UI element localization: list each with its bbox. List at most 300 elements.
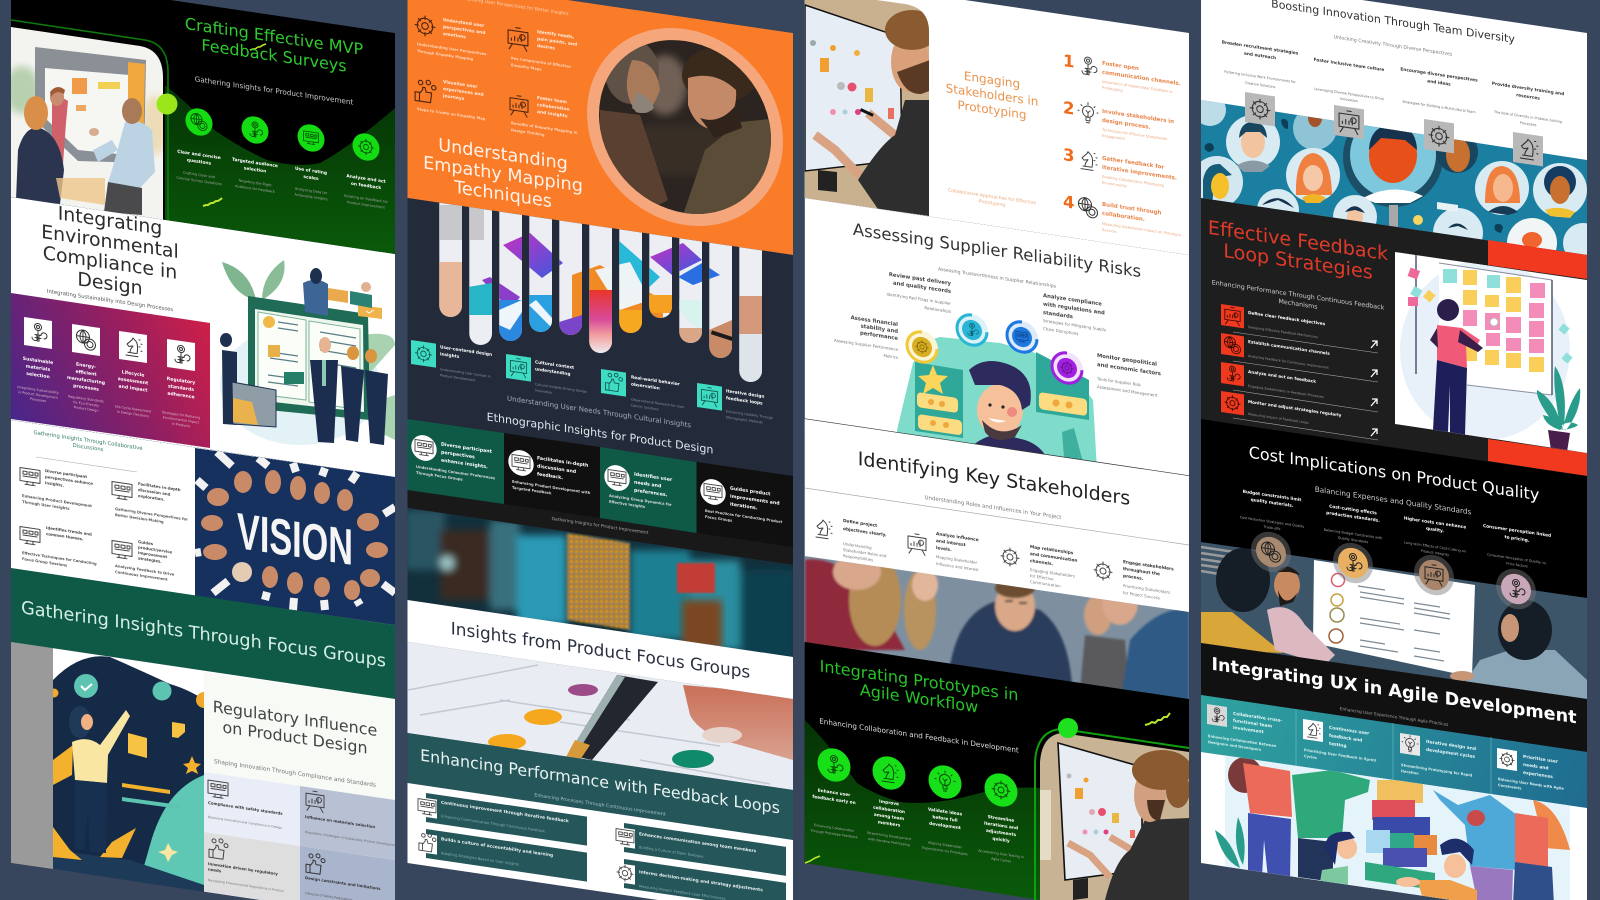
illustration: smiling man with ratings: [897, 337, 1097, 470]
white slide background: [805, 0, 1189, 255]
item 4: Best Practices for Conducting Product: [705, 509, 783, 524]
item 2: with Iterative Prototyping: [868, 837, 910, 847]
item 4: iterations.: [730, 502, 758, 512]
item: financial: [834, 313, 899, 360]
card 3: Centric Solutions: [631, 403, 659, 412]
card 1: insights: [440, 351, 460, 360]
column 3: quality.: [1426, 526, 1444, 534]
icon tile 4: [167, 339, 195, 371]
column 1: Creative Solutions: [1245, 81, 1276, 89]
column 2: [1324, 503, 1382, 546]
arrow 3: [1371, 399, 1377, 406]
item 4: Prioritizing Stakeholders: [1123, 583, 1170, 595]
item 2: selection: [244, 165, 266, 175]
item 1: Through Empathy Mapping: [417, 49, 473, 61]
item 1: [176, 149, 222, 186]
column 2: Cost-cutting effects: [1329, 504, 1377, 517]
column 4: to pricing.: [1505, 534, 1530, 544]
title: Integrating UX in Agile Development: [1211, 655, 1577, 728]
item 1: in Product Development: [18, 390, 58, 400]
item: geopolitical: Tools for Supplier Risk: [1096, 376, 1142, 388]
step 4: Success: [1102, 228, 1117, 234]
item 2: Analyze influence: [936, 531, 979, 543]
item 3 detail: Focus Group Sessions: [22, 557, 68, 568]
card 2: [1303, 719, 1376, 769]
lime squiggle bottom: [805, 856, 820, 863]
column 4: [1483, 523, 1551, 572]
list row 4: [1221, 391, 1342, 430]
icon badge 1: [1251, 529, 1291, 575]
column 4: Processes: [1520, 121, 1537, 127]
subtitle: Integrating Sustainability into Design Processes: [47, 289, 173, 313]
item 2: processes: [73, 383, 99, 393]
icon circle 4: [352, 132, 380, 162]
item 4: and insights: [537, 109, 568, 120]
item 2: Targeted audience: [232, 157, 278, 169]
photo ring: [587, 15, 783, 239]
item 4: Regulatory: [167, 376, 195, 386]
column 1: quality materials.: [1251, 497, 1294, 509]
icon circle 1: [186, 107, 212, 137]
text block background: [204, 672, 395, 800]
card 1: Understanding User Context in: [440, 367, 491, 379]
icon tile 2: [72, 324, 100, 356]
item 2: desires: [537, 43, 555, 52]
image frame: [1035, 729, 1189, 900]
item 4: [978, 813, 1024, 865]
item 1: perspectives: [441, 450, 475, 460]
step 2: Involve stakeholders in: [1102, 109, 1174, 125]
card 4: experiences: [1523, 770, 1553, 780]
subtitle: Balancing Expenses and Quality Standards: [1315, 485, 1471, 517]
item 4: process.: [1123, 573, 1144, 582]
card 2: feedback and: [1329, 733, 1362, 744]
lime accent circle: [156, 94, 178, 114]
card 1: Enhancing Communication Through Continuous Feedback: [441, 814, 546, 834]
card 1: Collaborative cross-: [1233, 711, 1282, 724]
panel: Effective Feedback Loop Strategies: [1201, 198, 1590, 476]
step 4: [1063, 192, 1182, 243]
item 3: Communication: [1030, 579, 1061, 589]
item 1: Understand user: [443, 17, 485, 29]
card 2: Cycles: [1304, 754, 1317, 760]
column 1: [1222, 39, 1299, 93]
heading: Gathering Insights Through Collaborative: [34, 430, 142, 452]
item 3: scales: [303, 174, 319, 182]
column 2: Innovation: [1340, 97, 1358, 103]
item 1: Diverse participant: [441, 442, 493, 455]
card 3: Iteration: [1401, 769, 1419, 776]
column 2: Foster inclusive team culture: [1314, 57, 1384, 73]
white slide background: [805, 419, 1189, 699]
card 1: Product Development: [440, 373, 476, 383]
title: Enhancing Performance with Feedback Loops: [420, 746, 780, 817]
item 1: objectives clearly.: [843, 526, 887, 538]
item 2: Key Components of Effective: [511, 56, 571, 69]
item 3: [417, 75, 486, 121]
panel: Integrating Environmental Compliance in Design: [11, 197, 395, 477]
item 1: emotions: [443, 31, 466, 40]
icon badge 4: [1496, 566, 1536, 612]
title: Crafting Effective MVP: [185, 14, 363, 59]
item 1: [417, 13, 487, 64]
card 1: User-centered design: [440, 344, 492, 358]
icon badge 2: [1333, 540, 1373, 586]
item 2: Regulatory Standards: [68, 394, 104, 404]
item 1: Define project: [843, 518, 877, 529]
card 3: Enhances communication among team members: [639, 831, 757, 854]
item 2: for Eco-Friendly: [73, 400, 99, 408]
item 3: Identifies user: [634, 472, 673, 483]
title: Insights from Product Focus Groups: [451, 619, 750, 683]
item 3: Lifecycle: [122, 369, 144, 379]
photo: man at a wall screen: [1035, 725, 1195, 900]
panel: Integrating Prototypes in Agile Workflow: [805, 642, 1195, 900]
card 4: Iterative design: [726, 388, 764, 400]
card 3: Iterative design and: [1426, 739, 1476, 752]
item 3: preferences.: [634, 488, 668, 498]
item 1: [45, 469, 93, 487]
item 2: Facilitates in-depth: [138, 481, 181, 492]
heading: Discussions: [73, 443, 104, 453]
item 2: Mapping Stakeholder: [936, 554, 978, 565]
safety item: Compliance with safety standards: [208, 800, 283, 816]
item 3: Life Cycle Assessment: [115, 404, 152, 414]
step 3: iterative improvements.: [1102, 165, 1177, 182]
item 2: Audience for Feedback: [235, 184, 276, 194]
green wave: [165, 85, 395, 256]
card 1: involvement: [1233, 725, 1264, 735]
item 4: adherence: [167, 391, 195, 401]
item 4: iterations and: [984, 821, 1018, 831]
icon circle 4: [984, 771, 1018, 809]
column 3: Long-term Effects of Cost-Cutting on: [1404, 540, 1466, 554]
item 1: Responsibilities: [843, 553, 873, 562]
item: review records: Review past delivery: [889, 272, 952, 287]
item 1: Enhance user: [818, 788, 851, 799]
title: Cost Implications on Product Quality: [1249, 443, 1540, 504]
green cell 1: [408, 419, 504, 504]
item 1 detail: Through User Insights: [22, 499, 70, 511]
column 2: [1314, 57, 1384, 107]
cell: safety: [204, 772, 300, 846]
item 4: Strategies for Reducing: [162, 410, 200, 420]
ring 3: [1006, 319, 1038, 355]
item 1: enhance insights.: [441, 458, 488, 470]
card 2: Innovation: [535, 388, 552, 395]
card dividers: [1296, 709, 1491, 794]
card 2: [418, 828, 587, 882]
column 3: and ideas: [1427, 78, 1451, 88]
meeting photo: [1195, 535, 1595, 710]
item 3: needs and: [634, 480, 661, 490]
item 2: Improve: [879, 799, 899, 807]
step 4: 4: [1063, 192, 1074, 213]
icon circle 3: [298, 123, 324, 153]
title: Techniques: [453, 178, 552, 212]
card 1: Continuous improvement through iterative feedback: [441, 800, 569, 824]
item 2: [908, 527, 979, 572]
item: compliance: standards: [1043, 310, 1073, 320]
item 3: experiences and: [443, 86, 484, 98]
card 2: Adapting Strategies Based on User Insights: [441, 851, 519, 867]
icon: chart board: [508, 27, 528, 51]
item 4: Agile Cycles: [991, 857, 1011, 863]
card 1: functional team: [1233, 718, 1272, 730]
step 1: communication channels.: [1102, 70, 1181, 87]
card 2: Prioritizing User Feedback in Sprint: [1304, 748, 1376, 763]
item 2: manufacturing: [67, 375, 105, 386]
icon: thumbs up: [415, 78, 436, 104]
card 2: understanding: [535, 366, 570, 377]
item 3: Identifies trends and: [46, 525, 92, 537]
panel: Insights from Product Focus Groups: [400, 500, 800, 699]
item 4: standards: [168, 383, 194, 393]
column 1: Broaden recruitment strategies: [1222, 39, 1299, 57]
item 4: Foster team: [537, 95, 567, 105]
icon badge 3: [1414, 552, 1454, 598]
materials item: Regulatory Challenges in Sustainable Product Development: [305, 830, 398, 848]
item 3: journeys: [442, 93, 465, 102]
item 4: [344, 173, 388, 210]
dark slide background: [408, 198, 793, 476]
item: geopolitical: Monitor geopolitical: [1097, 353, 1157, 368]
item 1 detail: Enhancing Product Development: [22, 493, 92, 508]
step 1: Importance of Stakeholder Feedback in: [1102, 80, 1172, 94]
item 4: collaboration: [537, 102, 570, 113]
item 1: perspectives enhance: [45, 474, 93, 486]
white lower area: [408, 783, 793, 900]
step 3: Enabling Collaborative Prototyping: [1102, 175, 1164, 188]
item: compliance: Analyze compliance: [1043, 293, 1102, 308]
item: compliance: Strategies for Mitigating Supply: [1043, 318, 1107, 332]
subtitle: Prototyping: [979, 199, 1005, 208]
item: geopolitical: Assessment and Management: [1097, 384, 1158, 398]
item 1: Diverse participant: [45, 468, 87, 479]
team photo: [800, 550, 1195, 710]
item 2: Streamlining Development: [867, 831, 912, 841]
card 1: [1207, 704, 1282, 755]
item 1: Integrating Sustainability: [17, 385, 59, 395]
item 2: collaboration: [873, 805, 905, 815]
item 2: Product Design: [74, 405, 98, 413]
item 1: Through Prototype Feedback: [809, 828, 858, 839]
item 1: Processes: [30, 397, 46, 403]
item 2: Influence and Interest: [936, 561, 979, 572]
item: financial: Metrics: [883, 353, 898, 360]
column 2: Leveraging Diverse Perspectives to Drive: [1314, 87, 1384, 101]
title: [946, 66, 1038, 124]
card 3: Streamlining Prototyping for Rapid: [1401, 763, 1473, 778]
item: compliance: Chain Disruptions: [1043, 326, 1078, 336]
title: Regulatory Influence: [213, 697, 377, 740]
column 1: [1240, 488, 1304, 535]
panel: Gathering Insights Through Focus Groups: [11, 420, 395, 699]
item 3 detail: Effective Techniques for Conducting: [22, 551, 97, 566]
icon tile 3: [119, 331, 147, 363]
item 3: assessment: [118, 376, 149, 387]
step 2: 2: [1063, 98, 1074, 119]
item 2: among team: [874, 812, 905, 822]
column 1: Cost Reduction Strategies and Quality: [1240, 515, 1304, 529]
column 3: Higher costs can enhance: [1404, 515, 1466, 531]
black cell 2: [504, 433, 600, 518]
column 3: Strategies for Building a Multicultural Team: [1402, 100, 1476, 114]
card 1: Designers and Developers: [1208, 740, 1261, 752]
red accent top: [1488, 240, 1587, 279]
step 3: Environments: [1102, 181, 1127, 188]
list row 2: Establish communication channels: [1248, 339, 1330, 356]
title: Compliance in: [43, 242, 177, 284]
photo: man pointing at a screen: [800, 0, 939, 225]
title band: [11, 568, 395, 699]
item: geopolitical: [1096, 353, 1161, 398]
image frame: [11, 20, 168, 225]
panel: Engaging Stakeholders in Prototyping: [800, 0, 1189, 255]
safety item: [208, 780, 283, 830]
card 4: Balancing User Needs with Agile: [1498, 777, 1564, 791]
title: [43, 206, 177, 296]
item 4: on feedback: [351, 181, 382, 191]
subtitle: Assessing Trustworthiness in Supplier Relationships: [938, 266, 1057, 290]
regulatory item: needs: [208, 867, 222, 874]
icon monitor 1: [20, 468, 40, 486]
card 4: feedback loops: [726, 395, 763, 407]
item 1: insights.: [45, 480, 64, 488]
icon tile 4: [1513, 132, 1543, 166]
title: Identifying Key Stakeholders: [858, 447, 1130, 510]
item 2: and interest: [936, 538, 966, 548]
item 3: Analyzing Data for: [295, 187, 328, 195]
item 3: for Effective: [1030, 573, 1054, 582]
title: Integrating Prototypes in: [820, 656, 1018, 705]
column 4: Price Factors: [1506, 561, 1528, 569]
heading rule: [36, 457, 137, 472]
subtitle: Understanding Roles and Influences in Your Project: [925, 495, 1061, 521]
item 3: Effective Insights: [609, 500, 646, 509]
item 2 detail: Gathering Diverse Perspectives for: [115, 507, 188, 522]
item 2 detail: Better Decision-Making: [115, 513, 164, 524]
item 3: Use of rating: [295, 166, 327, 176]
arrow 1: [1371, 341, 1377, 348]
ring 1: [906, 329, 938, 365]
card 4: Enhancing Usability Through: [726, 409, 773, 420]
item 4: Guides product: [730, 486, 771, 498]
step 3: [1063, 145, 1177, 196]
red accent bottom: [1488, 439, 1587, 476]
column 3: Encourage diverse perspectives: [1400, 66, 1478, 84]
step 2: design process.: [1102, 118, 1151, 131]
title: Environmental: [41, 221, 179, 263]
lime squiggle bottom: [203, 198, 222, 206]
card 4: Ethnographic Methods: [726, 415, 763, 425]
icon circle 2: [242, 115, 268, 145]
icon monitor 4: [112, 541, 132, 559]
column 4: The Role of Diversity in Problem-Solving: [1493, 110, 1562, 124]
constraints item: Design constraints and limitations: [305, 875, 381, 891]
icon: head: [415, 15, 435, 37]
card 4: [697, 383, 773, 426]
column 4: [1492, 81, 1564, 131]
card 3: Building a Culture of Open Dialogue: [639, 845, 704, 859]
regulatory item: Navigating Environmental Regulations in Product: [208, 878, 285, 893]
title: [213, 697, 377, 759]
item 4: Iterating on Feedback for: [344, 194, 388, 204]
list row 1: Designing Effective Feedback Mechanisms: [1248, 325, 1318, 339]
white title band: [408, 600, 793, 699]
panel: Enhancing Performance with Feedback Loops: [400, 640, 800, 900]
card 3: [616, 822, 786, 876]
title: Empathy Mapping: [423, 153, 583, 197]
item 2: [508, 448, 591, 501]
dark slide background: [1201, 198, 1587, 476]
lime squiggle top: [1145, 713, 1170, 725]
item 4: Accelerating User Testing in: [978, 849, 1024, 859]
orange slide background: [408, 0, 793, 255]
gray strip: [11, 642, 53, 869]
card 3: Real-world behavior: [631, 374, 681, 388]
icon circle 2: [872, 754, 906, 792]
column 1: Fostering Inclusive Work Environments for: [1224, 70, 1296, 84]
photo: fists around the word VISION: [195, 440, 395, 630]
regulatory item: [208, 837, 285, 893]
column 3: Product Integrity: [1421, 549, 1449, 557]
item 4: Design Thinking: [511, 128, 545, 137]
regulatory item: Innovation driven by regulatory: [208, 861, 278, 876]
section rule under title: [805, 488, 1189, 545]
item 2: feedback.: [537, 471, 563, 481]
item 1: Understanding Consumer Preferences: [416, 465, 496, 481]
item 3: [115, 368, 152, 419]
item 4: Product Improvement: [347, 200, 385, 210]
item 2: Empathy Maps: [511, 63, 542, 72]
item: financial: Assess financial: [851, 315, 898, 328]
item 2: Energy-: [76, 362, 96, 370]
panel: Integrating UX in Agile Development: [1195, 643, 1595, 900]
item 2: discussion and: [537, 463, 576, 475]
step 3: 3: [1063, 145, 1074, 166]
step 1: Foster open: [1102, 61, 1139, 72]
item 4: throughout the: [1123, 566, 1160, 577]
title: Gathering Insights Through Focus Groups: [21, 598, 386, 672]
step 1: Prototyping: [1102, 86, 1123, 93]
item 1: materials: [26, 364, 50, 373]
icon: bridge: [510, 95, 528, 117]
lime squiggle top: [250, 44, 266, 50]
cell: constraints: [300, 846, 395, 900]
blurred lab photo: [400, 500, 800, 670]
title: Understanding: [438, 136, 568, 175]
item 3: [1001, 540, 1077, 591]
item 3: channels.: [1030, 558, 1054, 567]
green accent circle: [1058, 718, 1078, 738]
card 2: testing: [1329, 741, 1347, 749]
title: Feedback Surveys: [201, 35, 347, 76]
item 3: Steps to Create an Empathy Map: [417, 107, 486, 121]
item 4: product/service: [138, 545, 173, 555]
subtitle: Mechanisms: [1278, 298, 1318, 311]
green wave: [805, 720, 1040, 900]
ring 2: [956, 312, 988, 348]
title: Stakeholders in: [946, 81, 1038, 109]
panel: Cost Implications on Product Quality: [1195, 419, 1595, 710]
title: Ethnographic Insights for Product Design: [487, 410, 713, 457]
card 4: Prioritize user: [1523, 754, 1559, 765]
title: Engaging: [964, 69, 1020, 91]
card 3: Observational Research for User-: [631, 397, 686, 409]
card 2: Cultural Insights Driving Design: [535, 382, 587, 394]
card 3: [1400, 733, 1476, 784]
